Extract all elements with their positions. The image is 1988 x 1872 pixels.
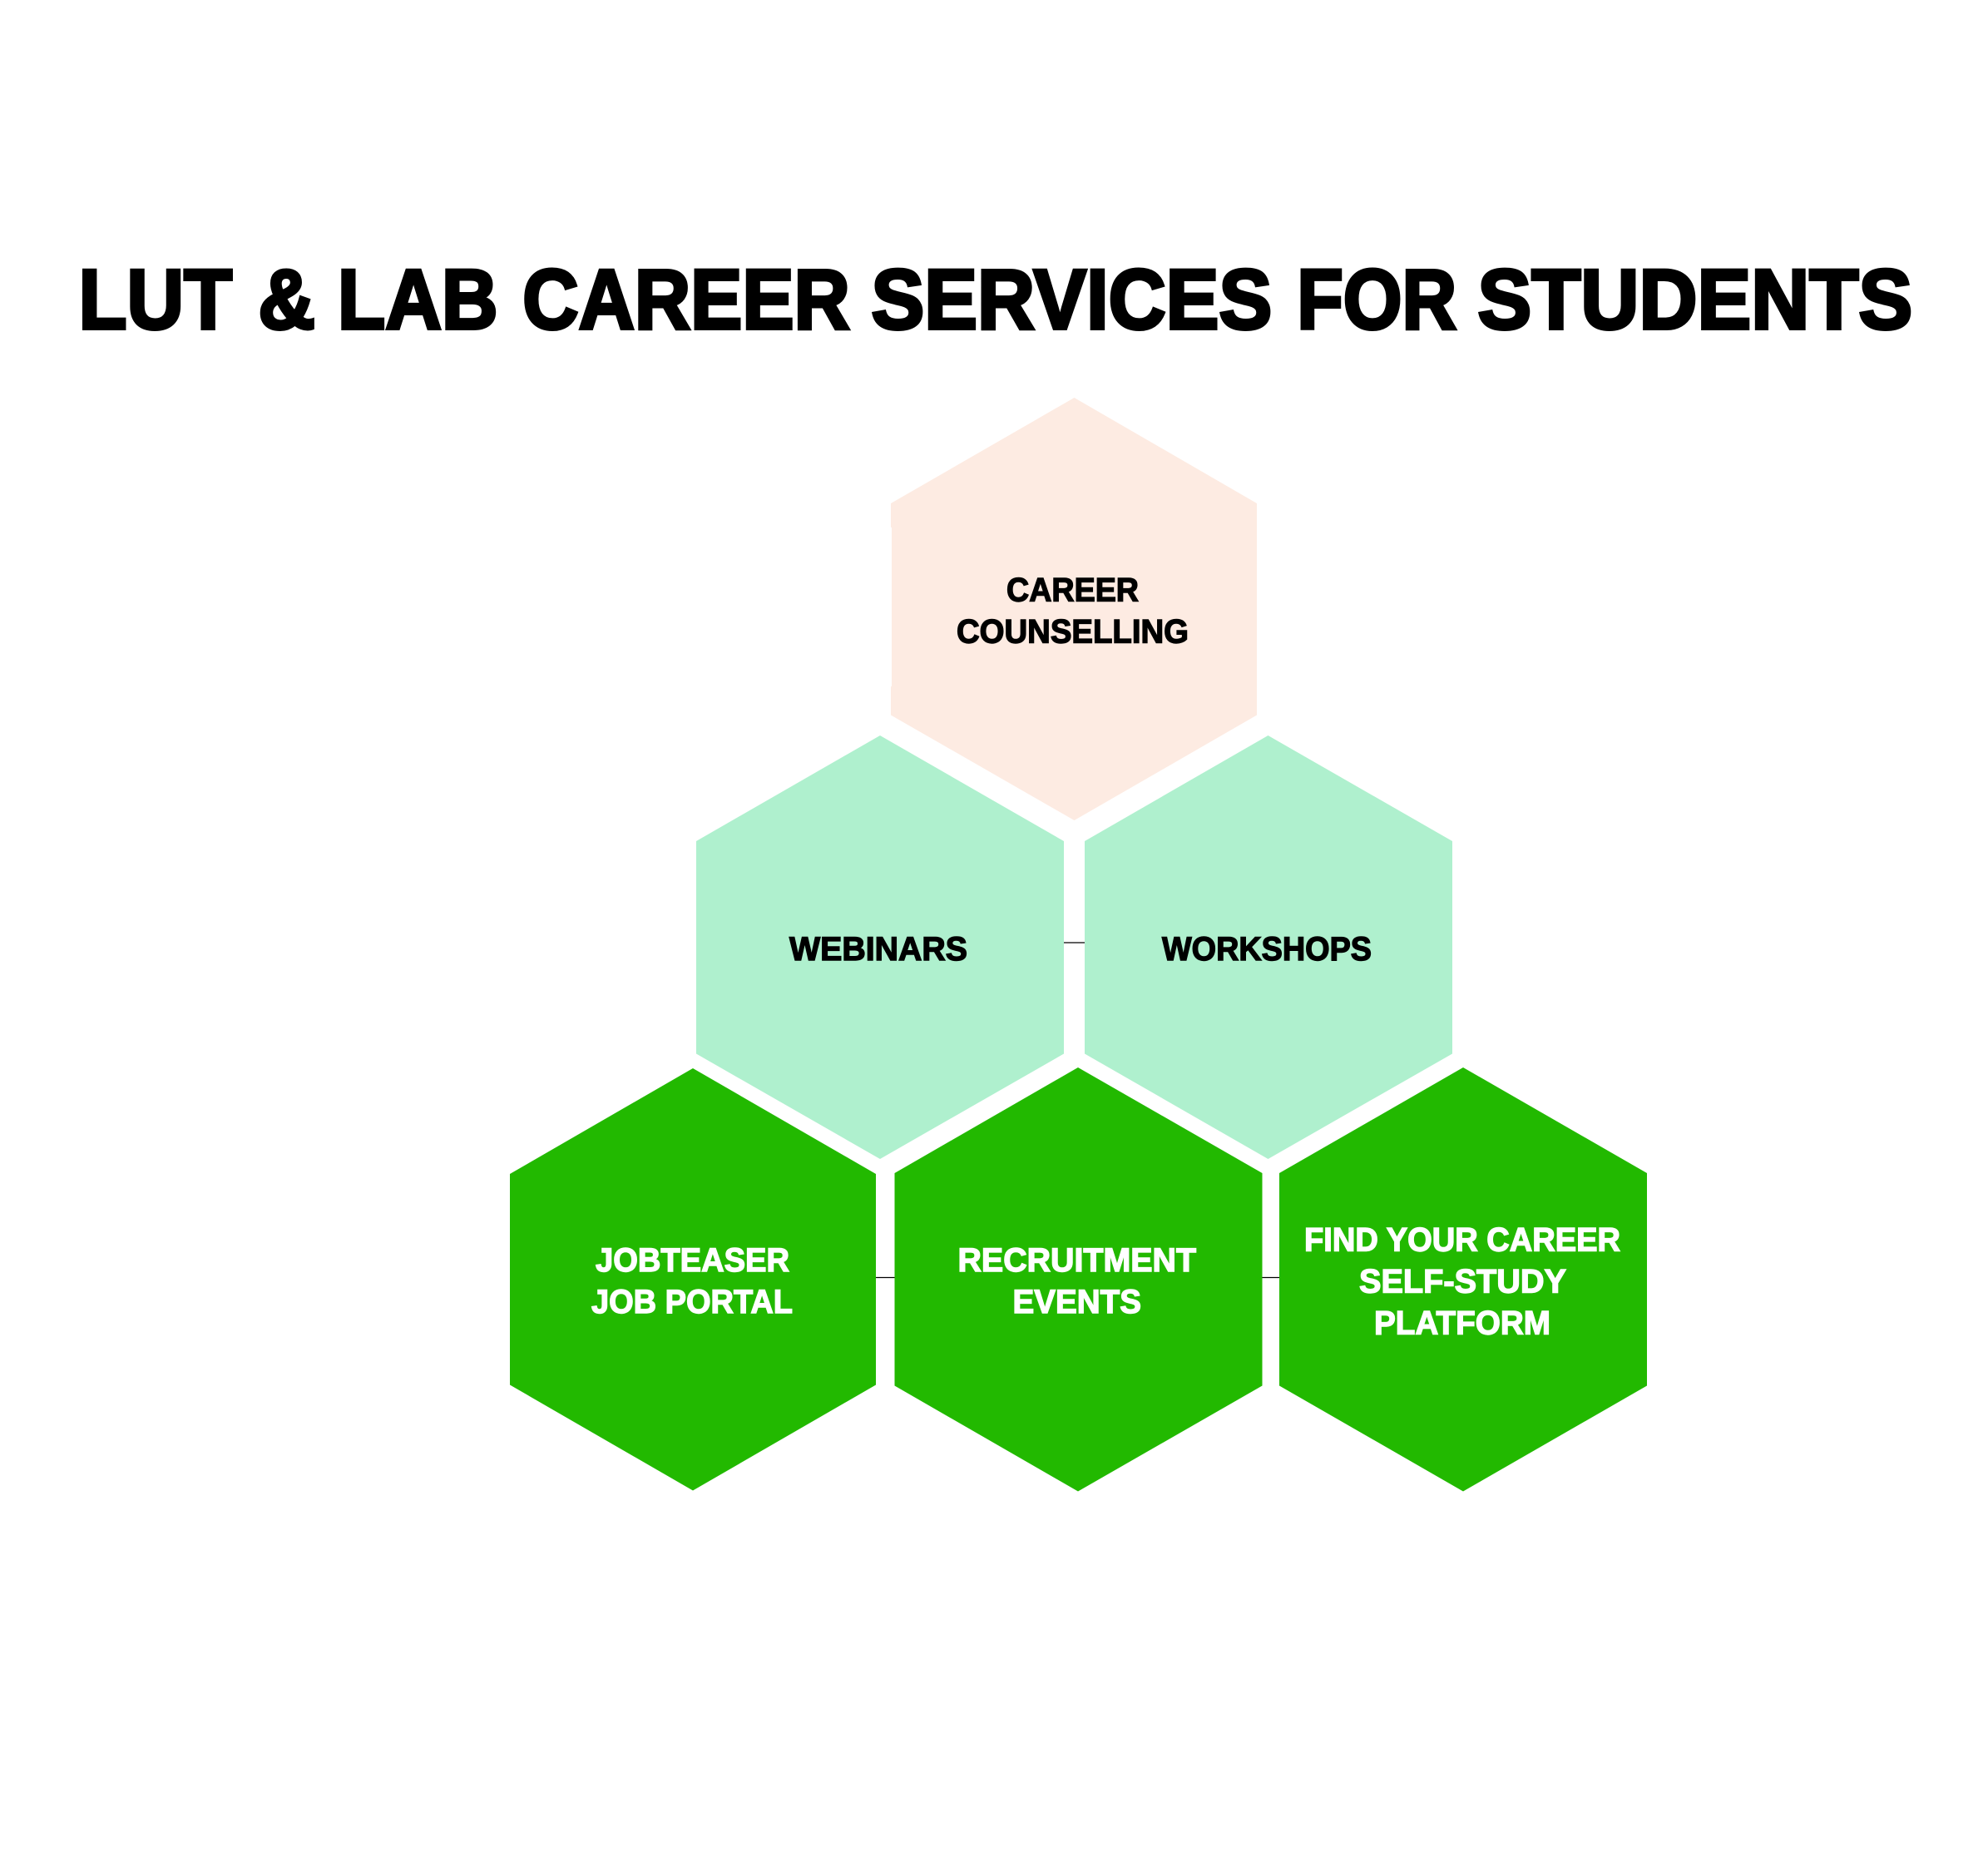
label: career counselling second line: COUNSELLING	[957, 614, 1189, 651]
connector: webinars to workshops	[1064, 942, 1085, 943]
label: workshops: WORKSHOPS	[1162, 931, 1372, 968]
label: webinars: WEBINARS	[789, 931, 967, 968]
label: find your career: FIND YOUR CAREER	[1304, 1221, 1620, 1258]
label: recruitment: RECRUITMENT	[958, 1242, 1196, 1279]
label: events: EVENTS	[1013, 1284, 1141, 1320]
title: &	[258, 252, 315, 347]
hexagon: webinars	[696, 735, 1064, 1159]
title: SERVICES	[872, 252, 1272, 347]
label: jobteaser: JOBTEASER	[596, 1242, 789, 1279]
title	[78, 252, 1912, 347]
hexagon: workshops	[1085, 735, 1452, 1159]
title: STUDENTS	[1477, 252, 1912, 347]
title: LUT	[78, 252, 232, 347]
label: self-study: SELF-STUDY	[1359, 1263, 1566, 1300]
label: career counselling: CAREER	[1006, 572, 1139, 609]
hexagon: recruitment events	[895, 1067, 1263, 1491]
hexagon: find your career self-study platform	[1279, 1067, 1647, 1491]
label: job portal: JOB PORTAL	[591, 1284, 793, 1320]
hexagon: jobteaser job portal	[510, 1068, 876, 1491]
label: platform: PLATFORM	[1374, 1305, 1550, 1341]
hexagon: career counselling	[891, 398, 1257, 820]
title: LAB	[338, 252, 498, 347]
title: FOR	[1297, 252, 1456, 347]
connector: jobteaser to recruitment events	[876, 1276, 895, 1278]
connector: recruitment events to find your career	[1262, 1276, 1279, 1278]
title: CAREER	[522, 252, 850, 347]
